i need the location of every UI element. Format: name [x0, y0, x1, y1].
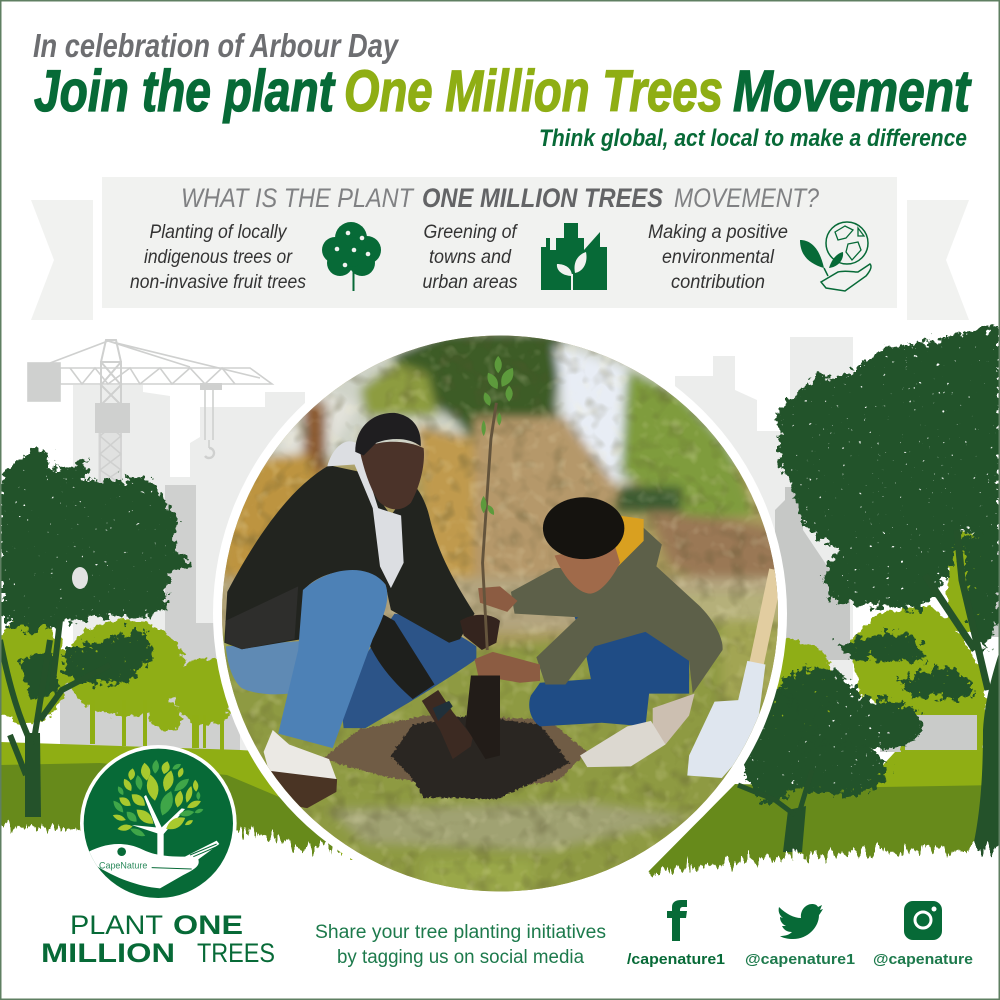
social call to action	[315, 922, 606, 968]
heading: in celebration: In celebration of Arbour Day	[33, 27, 399, 64]
logo brand	[99, 847, 147, 870]
text: positive contribution	[648, 222, 788, 293]
photo ring	[213, 326, 787, 900]
father	[224, 413, 500, 808]
panel heading: WHAT IS THE PLANT	[181, 183, 415, 213]
text: greening: urban areas	[422, 272, 518, 293]
panel heading: ONE MILLION TREES	[422, 183, 663, 213]
text: planting: Planting of locally	[150, 222, 288, 243]
crane	[28, 340, 272, 485]
main title: One Million Trees	[344, 59, 723, 124]
panel: what is the movement	[102, 177, 897, 308]
logo brand: CapeNature	[99, 860, 147, 870]
icon: globe, leaf and hand	[800, 222, 871, 291]
white ground with grass fringe	[0, 826, 1000, 1000]
ribbon ends	[31, 200, 969, 320]
handle: facebook: /capenature1	[627, 951, 725, 968]
icon: instagram	[904, 901, 942, 940]
logo wordmark: MILLION	[41, 938, 175, 968]
icon: twitter	[779, 904, 823, 939]
dark tree, right	[777, 325, 1000, 860]
text: planting: indigenous trees or	[144, 247, 293, 268]
text: positive contribution: environmental	[662, 247, 775, 268]
panel heading: MOVEMENT?	[674, 183, 819, 213]
icon: city with leaves	[541, 223, 607, 290]
social call to action: Share your tree planting initiatives	[315, 922, 606, 943]
photo: father and son planting a tree	[220, 330, 790, 900]
icon: tree	[322, 222, 381, 291]
dark tree, left	[0, 447, 190, 817]
text: positive contribution: contribution	[671, 272, 765, 293]
small dark tree, right	[738, 668, 924, 852]
logo hand	[80, 841, 219, 888]
logo wordmark: TREES	[197, 938, 275, 968]
handle: instagram: @capenature	[873, 951, 973, 968]
shovel	[687, 570, 776, 778]
text: greening	[422, 222, 518, 293]
logo wordmark	[41, 910, 275, 968]
photo texture	[220, 330, 790, 900]
background skyline with crane	[28, 337, 1000, 770]
logo wordmark: PLANT	[70, 910, 163, 940]
text: positive contribution: Making a positive	[648, 222, 788, 243]
text: planting: non-invasive fruit trees	[130, 272, 306, 293]
main title	[34, 59, 972, 124]
social call to action: by tagging us on social media	[337, 947, 584, 968]
sapling	[465, 356, 517, 759]
handle: twitter: @capenature1	[745, 951, 855, 968]
icon: facebook	[667, 900, 687, 941]
text: greening: towns and	[429, 247, 512, 268]
text: planting	[130, 222, 306, 293]
light green background trees, left	[0, 620, 235, 750]
light green background trees, right	[753, 533, 985, 760]
logo tree	[111, 759, 204, 857]
boy	[475, 497, 723, 767]
grassy hills	[0, 742, 1000, 880]
panel heading	[181, 183, 819, 213]
logo wordmark: ONE	[173, 910, 243, 940]
logo: CapeNature Plant One Million Trees	[80, 745, 237, 902]
text: greening: Greening of	[424, 222, 518, 243]
soil mound	[322, 715, 587, 799]
main title: Join the plant	[34, 59, 336, 124]
